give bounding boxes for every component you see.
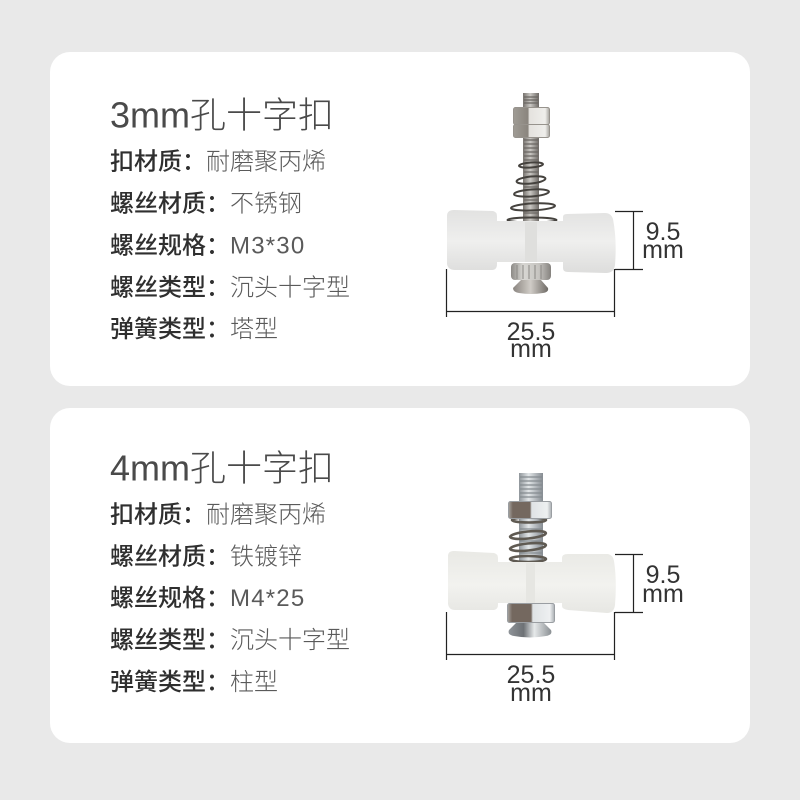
title: 4mm: 4mm孔十字扣 [110, 448, 334, 488]
dimension: width 25.5 mm: mm [510, 679, 552, 707]
dimension: width 25.5 mm [446, 269, 614, 363]
spec list: 3mm: 塔型 [230, 316, 278, 343]
spec list: 3mm [110, 148, 350, 343]
spec list: 4mm: 螺丝材质： [110, 544, 230, 570]
dimension: width 25.5 mm: 25.5 [507, 661, 555, 689]
spec list: 4mm: 扣材质： [110, 502, 206, 528]
spec list: 3mm: 螺丝类型： [110, 274, 230, 302]
spec list: 3mm: 不锈钢 [230, 190, 302, 218]
dimension: height 9.5 mm [615, 554, 684, 612]
spec list: 3mm: 扣材质： [110, 148, 206, 176]
spec list: 4mm: 螺丝规格： [110, 585, 230, 612]
panel: 4mm cross buckle [50, 408, 750, 743]
spec list: 3mm: 螺丝材质： [110, 190, 230, 218]
panel: 3mm cross buckle [50, 52, 750, 386]
dimension: height 9.5 mm: 9.5 [646, 561, 680, 589]
dimension: height 9.5 mm [615, 212, 684, 270]
product photo: 4mm buckle with column spring [448, 473, 616, 638]
spec list: 4mm: 沉头十字型 [230, 627, 350, 654]
spec list: 4mm: 柱型 [230, 669, 278, 696]
dimension: height 9.5 mm: 9.5 [646, 218, 680, 246]
dimension: width 25.5 mm: 25.5 [507, 318, 555, 346]
spec list: 4mm: 铁镀锌 [230, 544, 302, 570]
spec list: 3mm: 螺丝规格： [110, 232, 230, 260]
spec list: 4mm: M4*25 [230, 585, 305, 612]
dimension: width 25.5 mm: mm [510, 335, 552, 363]
spec list: 4mm: 耐磨聚丙烯 [206, 502, 326, 528]
spec list: 3mm: 耐磨聚丙烯 [206, 148, 326, 176]
spec list: 4mm: 螺丝类型： [110, 627, 230, 654]
dimension: height 9.5 mm: mm [642, 236, 684, 264]
dimension: height 9.5 mm: mm [642, 580, 684, 608]
title: 3mm: 3mm孔十字扣 [110, 94, 334, 136]
spec list: 3mm: 沉头十字型 [230, 274, 350, 302]
spec list: 3mm: 弹簧类型： [110, 316, 230, 343]
dimension: width 25.5 mm [446, 612, 614, 707]
spec list: 3mm: M3*30 [230, 232, 305, 260]
spec list: 4mm [110, 502, 350, 696]
spec list: 4mm: 弹簧类型： [110, 669, 230, 696]
product photo: 3mm buckle with tower spring [447, 93, 616, 294]
